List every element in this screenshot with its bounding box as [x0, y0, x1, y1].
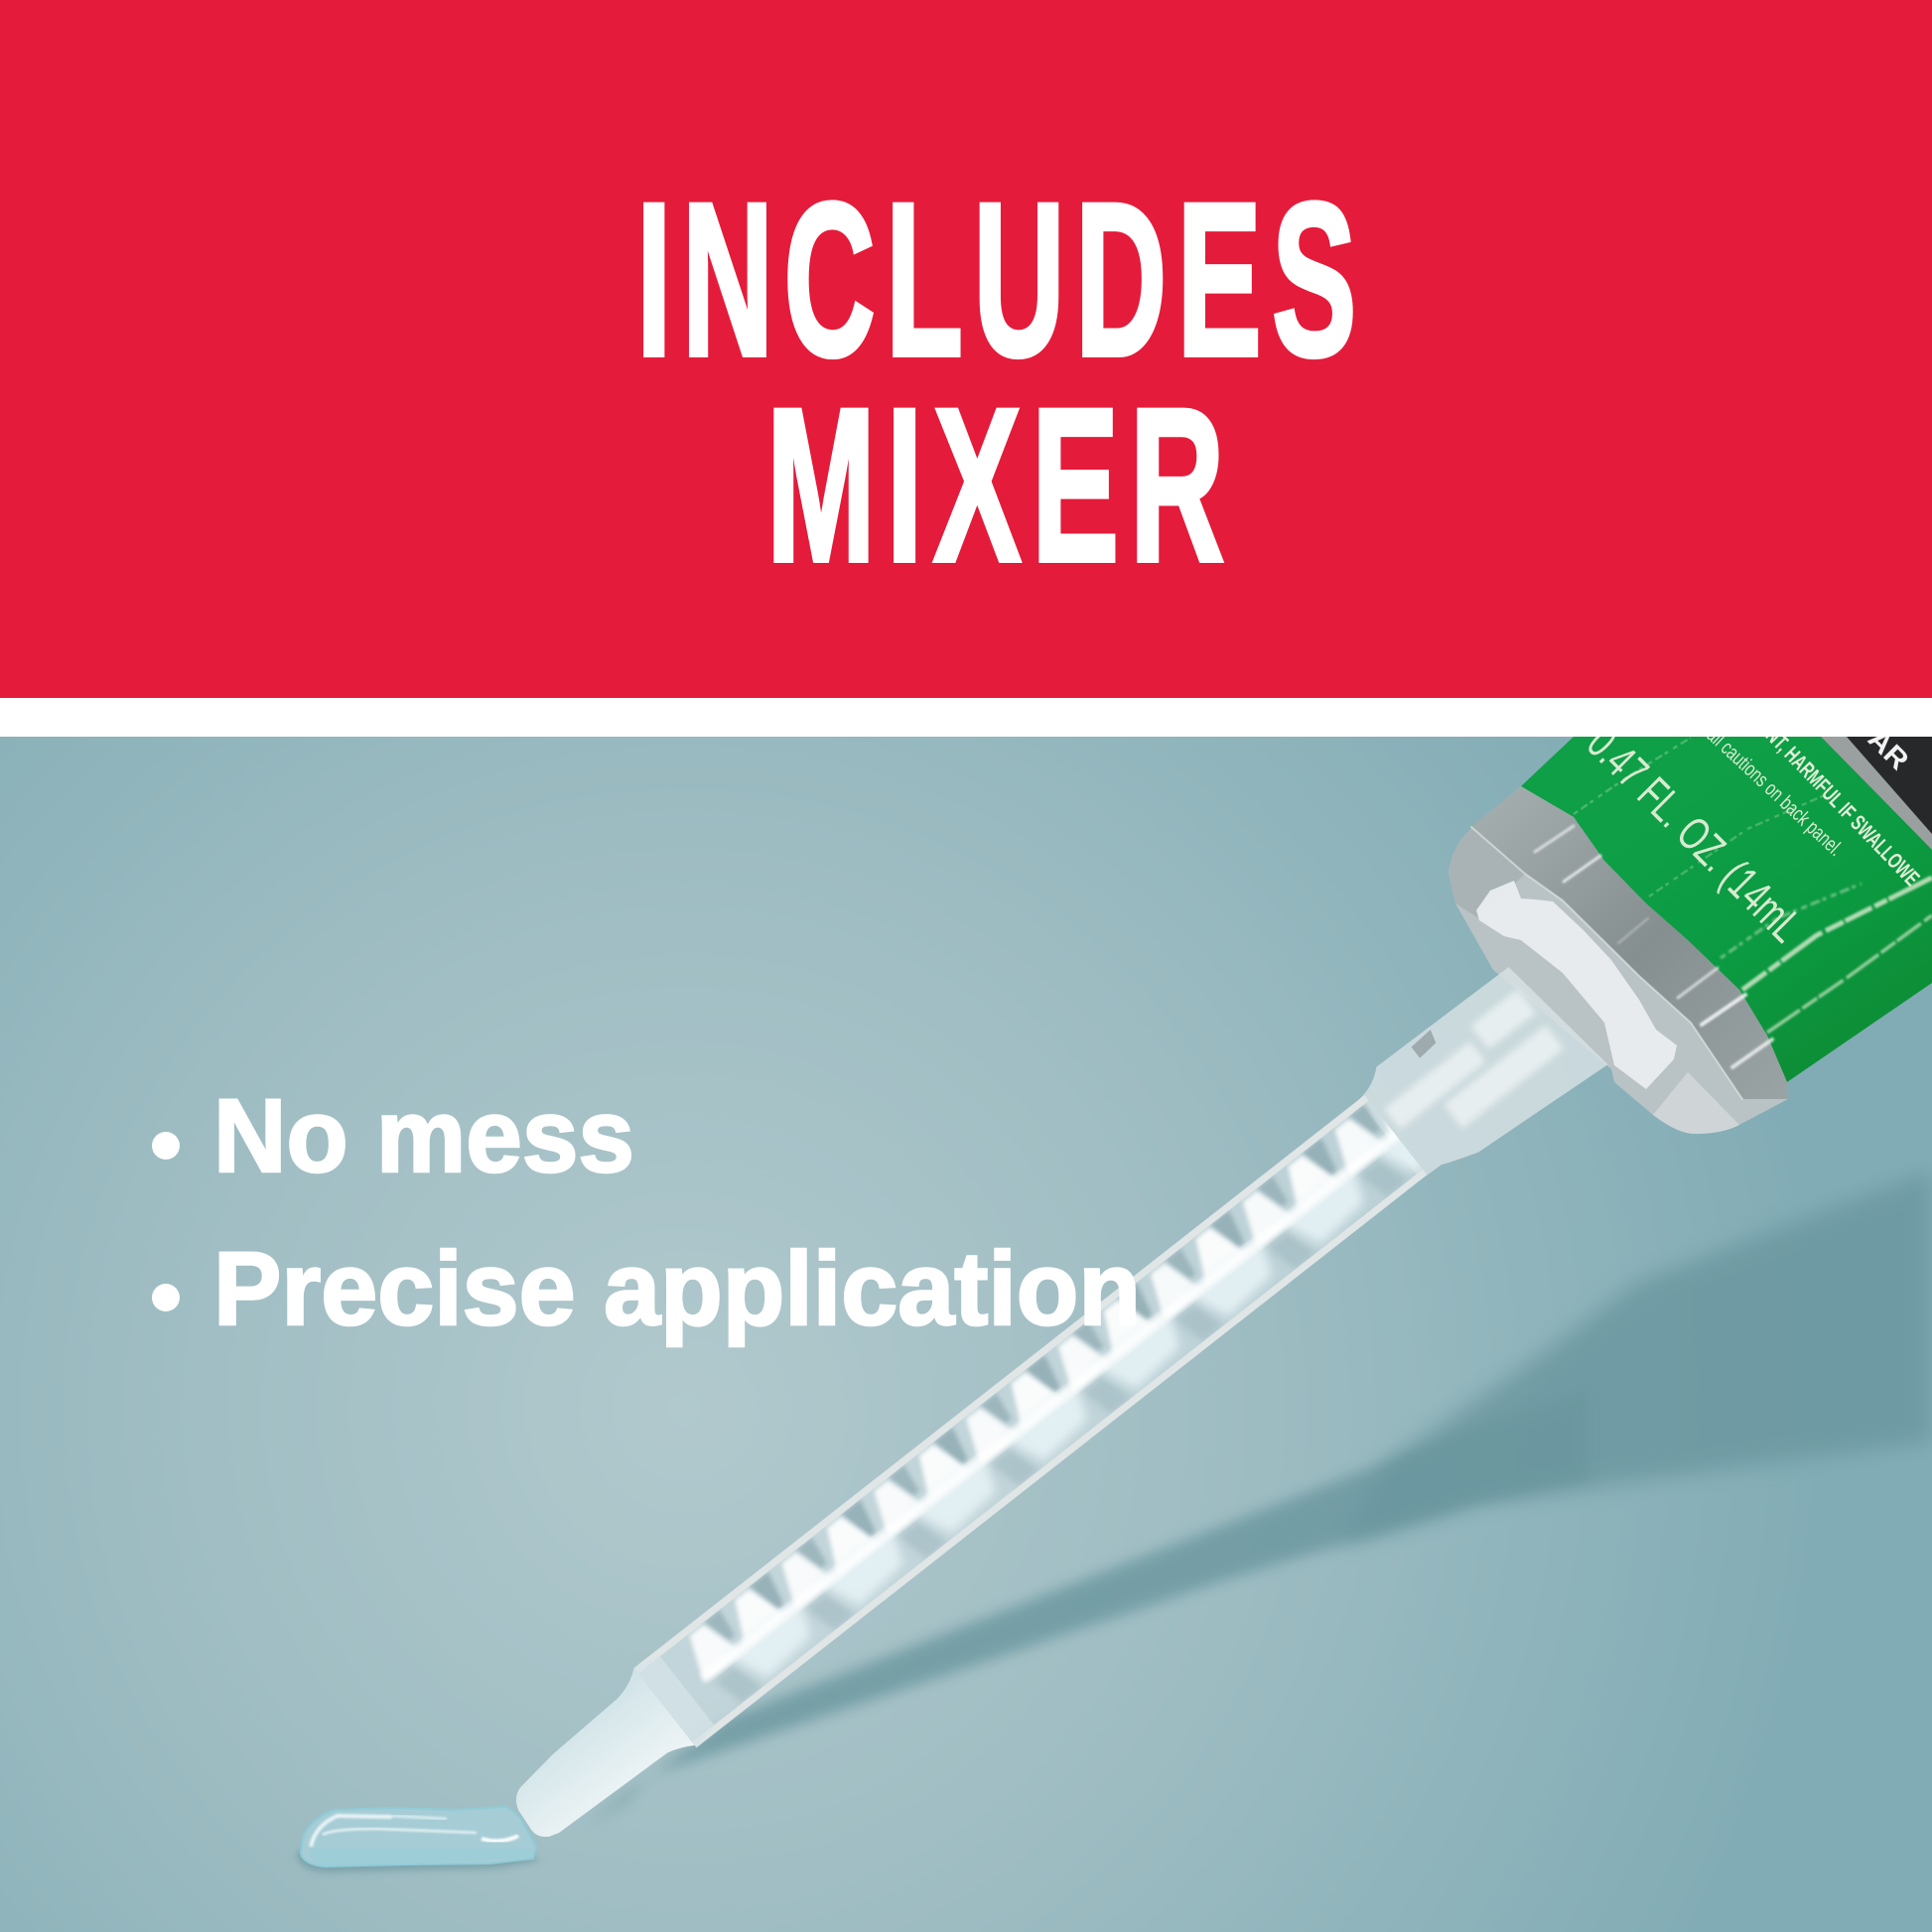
bullet list: [152, 1078, 1141, 1347]
cast shadow of mixer and cartridge: [586, 1171, 1932, 1825]
green label: [1521, 737, 1932, 1082]
bullet: no mess: No mess: [213, 1078, 634, 1194]
cap ring band: [1471, 786, 1788, 1099]
heading: includes mixer: MIXER: [766, 364, 1235, 608]
mixer nozzle: [483, 953, 1608, 1878]
mixing tube: [633, 1095, 1428, 1747]
label text: volume and cautions: [1588, 737, 1920, 944]
heading: includes mixer: INCLUDES: [636, 158, 1367, 402]
nozzle collar: [1358, 967, 1608, 1179]
label highlights: [1574, 738, 1932, 1033]
cap ring ribs: [1471, 826, 1772, 1099]
panel: red header band: [0, 0, 1932, 698]
label text: volume and cautions: 0.47 FL. OZ. (14mL: [1578, 717, 1813, 951]
cartridge: [1449, 715, 1932, 1134]
label text: volume and cautions: all cautions on back panel.: [1703, 724, 1847, 861]
heading: includes mixer: [636, 158, 1367, 608]
label text: volume and cautions: AR: [1863, 723, 1915, 775]
helical mixing elements: [688, 1104, 1420, 1702]
glue bead: [296, 1807, 541, 1872]
black label stripe: [1821, 737, 1932, 850]
frosted tip: [516, 1668, 695, 1837]
white flange: [1476, 881, 1677, 1089]
cartridge cap body: [1449, 786, 1788, 1134]
panel: product photo background: [0, 737, 1932, 1932]
bullet: precise application: Precise application: [213, 1231, 1141, 1347]
